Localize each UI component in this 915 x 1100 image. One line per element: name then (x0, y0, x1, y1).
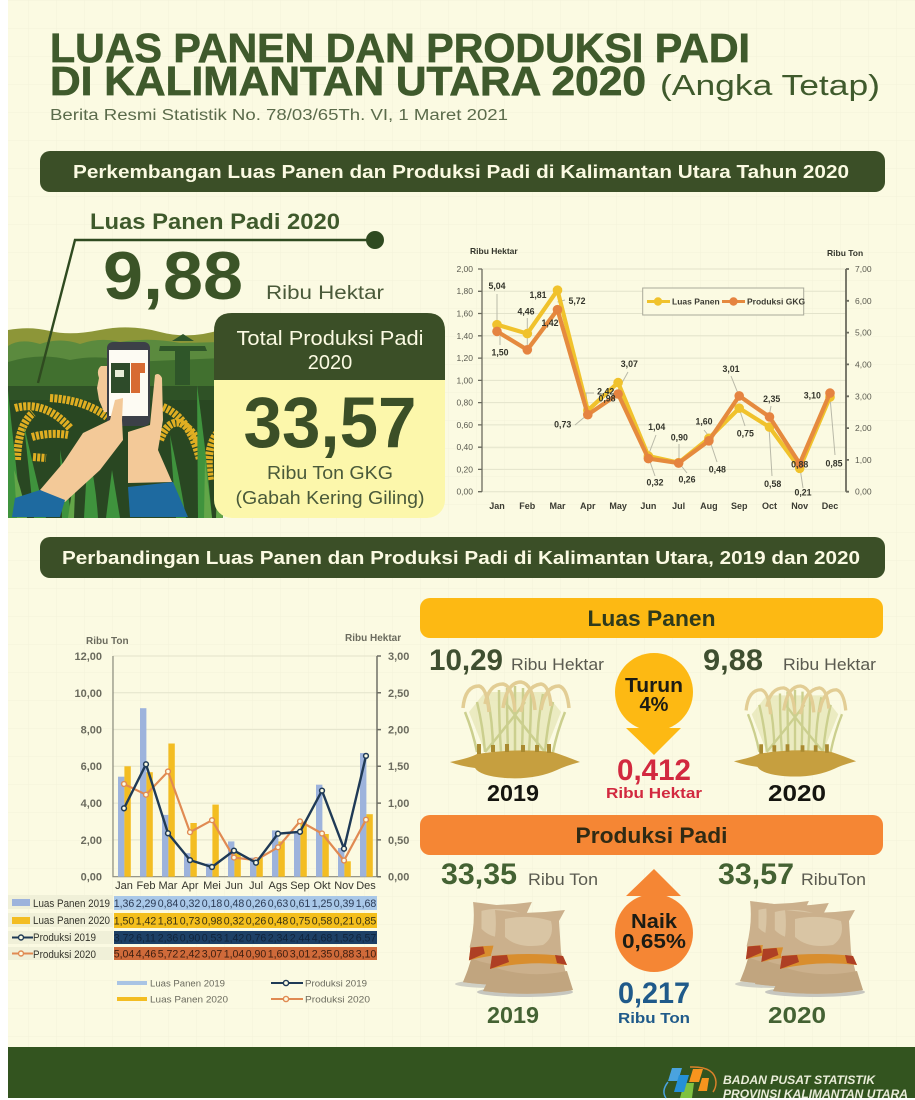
panel: total produksi padi: 33,57 (244, 384, 416, 463)
data table: Jul (249, 880, 263, 892)
line chart: luas panen dan produksi 2020: 0,00 (855, 487, 872, 497)
line chart: luas panen dan produksi 2020: Ribu Hektar (470, 246, 518, 256)
title: LUAS PANEN DAN PRODUKSI PADI (50, 25, 750, 71)
data table: 6,57 (356, 932, 376, 944)
line chart: luas panen dan produksi 2020: 0,20 (456, 464, 473, 474)
line: produksi 2020 (122, 769, 368, 863)
data table: 0,98 (202, 916, 222, 928)
value: luas panen 2019: Ribu Hektar (511, 655, 604, 674)
data table: 1,36 (114, 898, 134, 910)
line chart: luas panen dan produksi 2020: Mar (549, 501, 566, 511)
data table: 0,58 (312, 916, 332, 928)
line chart: luas panen dan produksi 2020: 0,73 (554, 420, 571, 430)
combo chart: perbandingan 2019 dan 2020: 2,00 (388, 724, 409, 736)
line chart: luas panen dan produksi 2020: 5,00 (855, 328, 872, 338)
footer bar (8, 1047, 915, 1098)
data table: Luas Panen 2020 (33, 915, 110, 927)
data table: 0,26 (246, 898, 266, 910)
data table: Nov (334, 880, 354, 892)
footer text: BADAN PUSAT STATISTIK (723, 1075, 876, 1087)
value: produksi 2019: 33,35 (441, 858, 517, 891)
combo chart: perbandingan 2019 dan 2020: 1,00 (388, 798, 409, 810)
data table: 4,46 (136, 948, 156, 960)
line chart: luas panen dan produksi 2020: 1,60 (695, 416, 713, 426)
bars: luas panen 2019 (118, 708, 366, 877)
combo chart: perbandingan 2019 dan 2020: 1,50 (388, 761, 409, 773)
panel: total produksi padi (214, 313, 445, 518)
data table: 0,76 (246, 932, 266, 944)
panel header: produksi padi: Produksi Padi (576, 823, 728, 848)
data table: 2,35 (312, 948, 332, 960)
value: produksi 2020: RibuTon (801, 870, 866, 889)
value: produksi 2020: 33,57 (718, 858, 794, 891)
data table: Mei (203, 880, 221, 892)
line chart: luas panen dan produksi 2020: Feb (519, 501, 536, 511)
data table: 1,68 (356, 898, 376, 910)
line chart: luas panen dan produksi 2020: 0,21 (794, 487, 812, 497)
data table: 3,07 (202, 948, 222, 960)
data table: 0,90 (180, 932, 200, 944)
title (50, 25, 880, 104)
line chart: luas panen dan produksi 2020: 3,01 (722, 364, 740, 374)
combo chart: perbandingan 2019 dan 2020: 12,00 (74, 651, 102, 663)
value: luas panen 2019 (429, 644, 604, 677)
icon: phone (107, 342, 150, 426)
data table: 0,26 (246, 916, 266, 928)
line chart: luas panen dan produksi 2020: 1,60 (456, 308, 473, 318)
data table: 2,34 (268, 932, 288, 944)
legend: Produksi GKG (747, 296, 805, 306)
icon: sacks 2019 (455, 902, 573, 997)
panel: total produksi padi: 2020 (308, 352, 352, 374)
hand: right holding phone (128, 374, 172, 483)
value: luas panen 2020 (703, 644, 876, 677)
panel header: luas panen: Luas Panen (588, 606, 716, 631)
value: produksi 2019 (441, 858, 598, 891)
year label 2020 produksi: 2020 (768, 1002, 826, 1028)
chart legend: Produksi 2020 (305, 994, 370, 1004)
line chart: luas panen dan produksi 2020: Apr (580, 501, 596, 511)
combo chart: perbandingan 2019 dan 2020: Ribu Ton (86, 636, 129, 647)
icon: BPS logo (664, 1067, 716, 1098)
combo chart: perbandingan 2019 dan 2020: 3,00 (388, 651, 409, 663)
heading: luas panen padi 2020: Luas Panen Padi 2020 (90, 209, 340, 234)
line chart: luas panen dan produksi 2020: 1,40 (456, 331, 473, 341)
data table: Mar (159, 880, 178, 892)
banner: perbandingan: Perbandingan Luas Panen dan Produksi Padi di Kalimantan Utara, 2019 dan 2020 (62, 548, 860, 568)
data table: 1,81 (158, 916, 178, 928)
data table: 0,48 (224, 898, 244, 910)
title: DI KALIMANTAN UTARA 2020 (50, 58, 646, 104)
data table: 0,75 (290, 916, 310, 928)
value: produksi 2019: Ribu Ton (528, 870, 598, 889)
panel: total produksi padi: Ribu Ton GKG (267, 463, 393, 483)
combo chart: perbandingan 2019 dan 2020: 8,00 (81, 724, 102, 736)
value: luas panen 2020: 9,88 (703, 644, 763, 677)
combo chart: perbandingan 2019 dan 2020: 10,00 (74, 688, 102, 700)
line chart: luas panen dan produksi 2020: 1,80 (456, 286, 473, 296)
legend: Luas Panen (672, 296, 720, 306)
line chart: luas panen dan produksi 2020: 0,80 (456, 398, 473, 408)
data table: 0,53 (202, 932, 222, 944)
line chart: luas panen dan produksi 2020: 6,00 (855, 296, 872, 306)
line chart: luas panen dan produksi 2020: 7,00 (855, 264, 872, 274)
combo chart: perbandingan 2019 dan 2020: 2,50 (388, 688, 409, 700)
data table: 1,04 (224, 948, 244, 960)
data table: 1,50 (114, 916, 134, 928)
line chart: luas panen dan produksi 2020: 0,75 (737, 429, 754, 439)
line chart: luas panen dan produksi 2020: May (609, 501, 627, 511)
year label 2020: 2020 (768, 780, 826, 806)
data table: 0,85 (356, 916, 376, 928)
line chart: luas panen dan produksi 2020: Ribu Ton (827, 248, 863, 258)
data table: 0,32 (224, 916, 244, 928)
arrow up: naik 0,65%: Naik (631, 911, 678, 933)
value: selisih produksi: Ribu Ton (618, 1010, 690, 1027)
icon: sacks 2020 (735, 901, 865, 997)
data table: Jan (115, 880, 133, 892)
panel: total produksi padi: (Gabah Kering Giling) (236, 488, 424, 508)
data table (8, 880, 377, 961)
data table: Produksi 2019 (33, 932, 96, 944)
bars: luas panen 2020 (124, 744, 373, 877)
value: 9,88 ribu hektar: 9,88 (103, 238, 243, 314)
hand: left pointing (40, 398, 123, 502)
combo chart: perbandingan 2019 dan 2020: 2,00 (81, 835, 102, 847)
combo chart: perbandingan 2019 dan 2020 (8, 633, 409, 1004)
footer text (723, 1075, 908, 1100)
data table: Apr (181, 880, 199, 892)
value: luas panen 2019: 10,29 (429, 644, 503, 677)
line chart: luas panen dan produksi 2020: 5,72 (568, 296, 586, 306)
line chart: luas panen dan produksi 2020: 0,90 (671, 432, 688, 442)
chart legend: Produksi 2019 (305, 978, 367, 988)
data table: Des (356, 880, 376, 892)
sleeves (12, 482, 188, 517)
value: selisih luas panen (606, 754, 702, 802)
data table: Luas Panen 2019 (33, 898, 110, 910)
data table: 2,44 (290, 932, 310, 944)
data table: 4,68 (312, 932, 332, 944)
line chart: luas panen dan produksi 2020: 0,98 (598, 393, 616, 403)
data table: 0,73 (180, 916, 200, 928)
data table: Okt (313, 880, 331, 892)
line chart: luas panen dan produksi 2020: 0,58 (764, 479, 781, 489)
line chart: luas panen dan produksi 2020: 1,00 (855, 455, 872, 465)
data table: 0,48 (268, 916, 288, 928)
banner: perkembangan: Perkembangan Luas Panen dan Produksi Padi di Kalimantan Utara Tahun 2020 (73, 162, 849, 182)
line chart: luas panen dan produksi 2020: 0,26 (678, 474, 696, 484)
banner: perbandingan (40, 537, 885, 578)
icon: rice field 2019 (450, 682, 580, 778)
line chart: luas panen dan produksi 2020: Jul (672, 501, 685, 511)
line chart: luas panen dan produksi 2020: 1,00 (456, 376, 473, 386)
data table: Feb (137, 880, 155, 892)
data table: 0,63 (268, 898, 288, 910)
line chart: luas panen dan produksi 2020: 4,46 (517, 306, 535, 316)
line chart: luas panen dan produksi 2020: Dec (822, 501, 838, 511)
value: selisih produksi: 0,217 (618, 977, 690, 1010)
line chart: luas panen dan produksi 2020: 0,40 (456, 442, 473, 452)
value: selisih produksi (618, 977, 690, 1027)
line chart: luas panen dan produksi 2020: 1,04 (648, 422, 665, 432)
illustration: hands holding phone in rice field (8, 327, 223, 518)
data table: 1,25 (312, 898, 332, 910)
panel header: produksi padi (420, 815, 883, 855)
line chart: luas panen dan produksi 2020: 0,85 (825, 459, 843, 469)
icon: rice field 2020 (734, 686, 856, 777)
data table: 1,42 (224, 932, 244, 944)
legend (643, 288, 805, 315)
year label 2019 produksi: 2019 (487, 1002, 539, 1028)
line chart: luas panen dan produksi 2020: 2,00 (855, 423, 872, 433)
data table: 3,72 (114, 932, 134, 944)
data table: 0,88 (334, 948, 354, 960)
line chart: luas panen dan produksi 2020: 1,42 (541, 318, 559, 328)
line chart: luas panen dan produksi 2020: 0,60 (456, 420, 473, 430)
arrow up: naik 0,65% (615, 869, 693, 972)
data table: 1,42 (136, 916, 156, 928)
combo chart: perbandingan 2019 dan 2020: 0,00 (388, 872, 409, 884)
data table: Ags (269, 880, 288, 892)
line chart: luas panen dan produksi 2020: 0,48 (709, 464, 726, 474)
line chart: luas panen dan produksi 2020: 2,00 (456, 264, 473, 274)
combo chart: perbandingan 2019 dan 2020: Ribu Hektar (345, 633, 401, 644)
line chart: luas panen dan produksi 2020: 4,00 (855, 359, 872, 369)
data table: 0,61 (290, 898, 310, 910)
line chart: luas panen dan produksi 2020: Nov (791, 501, 808, 511)
line chart: luas panen dan produksi 2020: 1,20 (456, 353, 473, 363)
line chart: luas panen dan produksi 2020: Aug (700, 501, 718, 511)
line chart: luas panen dan produksi 2020: 0,88 (791, 459, 808, 469)
data table: 1,52 (334, 932, 354, 944)
line chart: luas panen dan produksi 2020: 3,00 (855, 391, 872, 401)
data table: 2,42 (180, 948, 200, 960)
value: selisih luas panen: Ribu Hektar (606, 785, 702, 802)
data table: 5,04 (114, 948, 134, 960)
line chart: luas panen dan produksi 2020: 0,00 (456, 487, 473, 497)
data table: 3,01 (290, 948, 310, 960)
line chart: luas panen dan produksi 2020: 5,04 (488, 281, 506, 291)
line chart: luas panen dan produksi 2020: 3,07 (621, 359, 638, 369)
line chart: luas panen dan produksi 2020 (456, 246, 872, 511)
value: selisih luas panen: 0,412 (617, 754, 691, 787)
value: luas panen 2020: Ribu Hektar (783, 655, 876, 674)
subtitle: Berita Resmi Statistik No. 78/03/65Th. VI, 1 Maret 2021 (50, 107, 508, 124)
data table: 3,10 (356, 948, 376, 960)
combo chart: perbandingan 2019 dan 2020: 6,00 (81, 761, 102, 773)
hand fingers behind phone (97, 366, 112, 412)
data table: 0,39 (334, 898, 354, 910)
data table: 0,32 (180, 898, 200, 910)
combo chart: perbandingan 2019 dan 2020: 0,00 (81, 872, 102, 884)
data table: 5,72 (158, 948, 178, 960)
data table: 0,21 (334, 916, 354, 928)
line chart: luas panen dan produksi 2020: 2,42 (597, 387, 614, 397)
line chart: luas panen dan produksi 2020: 0,32 (646, 477, 664, 487)
data table: 2,29 (136, 898, 156, 910)
chart legend (117, 978, 370, 1004)
data table: 0,84 (158, 898, 178, 910)
line chart: luas panen dan produksi 2020: 2,35 (763, 394, 780, 404)
value: produksi 2020 (718, 858, 866, 891)
title: (Angka Tetap) (660, 70, 880, 102)
arrow down: turun 4%: 4% (640, 694, 669, 716)
panel: total produksi padi: Total Produksi Padi (236, 328, 424, 350)
line chart: luas panen dan produksi 2020: Oct (762, 501, 777, 511)
line: produksi 2019 (122, 754, 368, 869)
chart legend: Luas Panen 2019 (150, 978, 225, 988)
panel header: luas panen (420, 598, 883, 638)
data table: Jun (225, 880, 243, 892)
leader line and dot (38, 231, 384, 383)
line chart: luas panen dan produksi 2020: Jun (640, 501, 656, 511)
arrow down: turun 4%: Turun (625, 675, 683, 697)
line chart: luas panen dan produksi 2020: Jan (489, 501, 505, 511)
arrow down: turun 4% (615, 653, 693, 755)
banner: perkembangan (40, 151, 885, 192)
combo chart: perbandingan 2019 dan 2020: 4,00 (81, 798, 102, 810)
data table: 0,18 (202, 898, 222, 910)
year label 2019: 2019 (487, 780, 539, 806)
value: 9,88 ribu hektar (103, 238, 385, 314)
data table: 0,90 (246, 948, 266, 960)
line chart: luas panen dan produksi 2020: 1,50 (491, 347, 509, 357)
line chart: luas panen dan produksi 2020: 1,81 (529, 290, 547, 300)
line chart: luas panen dan produksi 2020: Sep (731, 501, 748, 511)
data table: 2,36 (158, 932, 178, 944)
data table: 1,60 (268, 948, 288, 960)
data table: 6,11 (136, 932, 156, 944)
data table: Produksi 2020 (33, 949, 96, 961)
arrow up: naik 0,65%: 0,65% (622, 931, 686, 953)
combo chart: perbandingan 2019 dan 2020: 0,50 (388, 835, 409, 847)
data table: Sep (290, 880, 310, 892)
chart legend: Luas Panen 2020 (150, 994, 228, 1004)
value: 9,88 ribu hektar: Ribu Hektar (266, 283, 385, 304)
line chart: luas panen dan produksi 2020: 3,10 (804, 390, 821, 400)
